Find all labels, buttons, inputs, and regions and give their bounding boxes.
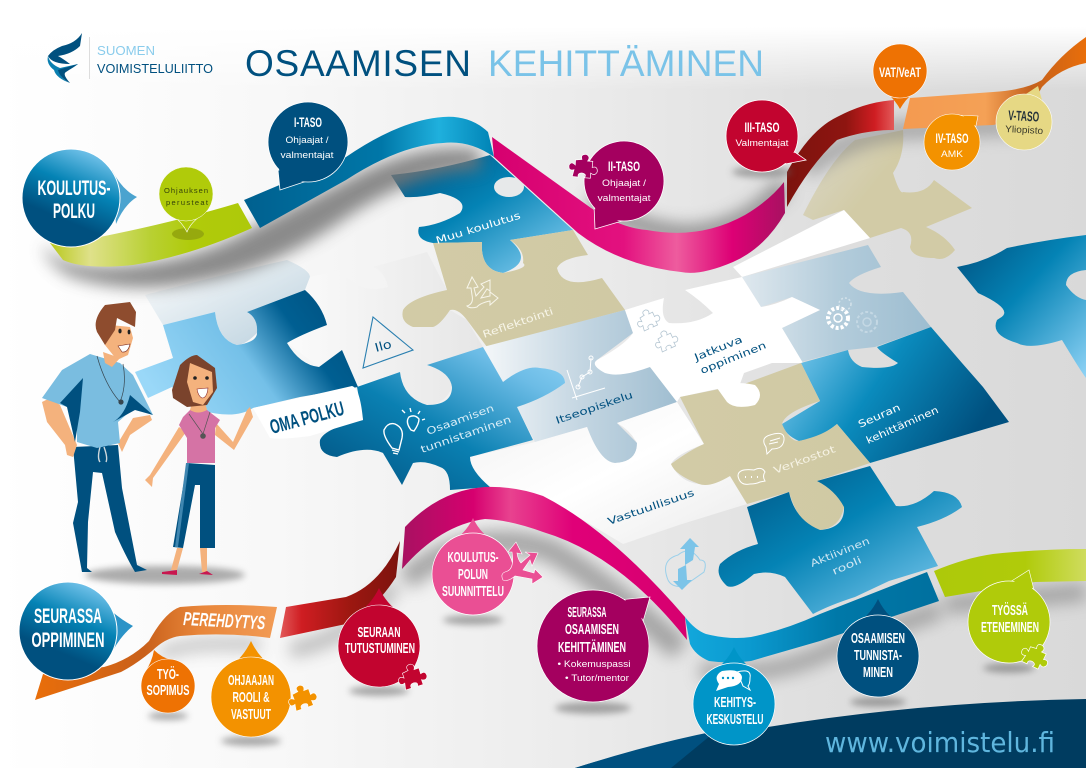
icon: speech bubbles: [716, 670, 750, 691]
bubble: Koulutuspolku: POLKU: [53, 200, 95, 223]
title: OSAAMISEN: [245, 43, 471, 84]
bottom ribbon: blue segment: [685, 572, 939, 662]
bubble: Seurassa oppiminen: [19, 582, 133, 680]
bubble: Seurassa osaamisen kehittäminen: SEURASSA: [568, 604, 607, 621]
shoes: [162, 570, 213, 575]
puzzle labels: rooli: [831, 555, 864, 578]
bubble: II-taso: II-TASO: [608, 158, 640, 174]
bubble: V-taso: [996, 86, 1052, 150]
bubble: Seurassa oppiminen: SEURASSA: [34, 605, 102, 628]
top ribbon: orange segment: [903, 37, 1086, 129]
piece: Ilo: [287, 252, 483, 405]
puzzle pieces: [135, 130, 1086, 614]
illustration: man: [42, 302, 245, 584]
bubble: Seurassa osaamisen kehittäminen: • Kokemuspassi: [558, 659, 630, 670]
hair: [172, 355, 217, 407]
icon: speech bubbles: [738, 433, 784, 484]
bubble: IV-taso: AMK: [941, 149, 964, 160]
title: KEHITTÄMINEN: [488, 43, 764, 84]
illustration: girl: [145, 355, 253, 575]
pants stripe: [175, 463, 189, 547]
puzzle labels: Aktiivinen: [809, 536, 872, 570]
right arm skin: [118, 415, 152, 452]
bubble: III-taso: [726, 100, 806, 178]
icon: branching arrows: [467, 277, 498, 308]
bubble: Seuraan tutustuminen: TUTUSTUMINEN: [345, 640, 415, 657]
top ribbon: blue segment: [244, 117, 494, 228]
top ribbon: dark red segment: [787, 100, 894, 207]
website address: www.voimistelu.fi: [825, 726, 1055, 759]
bubble: I-taso: valmentajat: [280, 150, 334, 161]
bubble: Työsopimus: SOPIMUS: [146, 682, 190, 699]
piece: left blue: [135, 290, 358, 415]
hair: [96, 302, 136, 345]
bubble: Ohjaajan rooli ja vastuut: ROOLI &: [232, 689, 270, 706]
bubble: III-taso: III-TASO: [744, 119, 780, 135]
bubble: II-taso: Ohjaajat /: [602, 178, 646, 189]
puzzle labels: Reflektointi: [481, 306, 555, 341]
bubble: V-taso: V-TASO: [1008, 107, 1040, 125]
face details: [193, 376, 197, 380]
legs: [171, 548, 207, 572]
face: [187, 363, 213, 405]
bubble: Ohjauksen perusteat: Ohjauksen: [164, 186, 208, 195]
arms: [145, 407, 253, 487]
icon: gears: [828, 298, 877, 332]
piece: Muu koulutus: [391, 155, 573, 273]
hole in Verkostot: [717, 383, 760, 407]
whistle: [189, 412, 210, 434]
puzzle labels: [419, 211, 940, 578]
oma polku label: OMA POLKU: [268, 398, 347, 439]
bubble: Koulutuspolun suunnittelu: [432, 518, 543, 625]
puzzle labels: tunnistaminen: [419, 415, 513, 456]
puzzle labels: Verkostot: [772, 444, 837, 477]
bubble: Osaamisen tunnistaminen: MINEN: [863, 664, 893, 681]
logo: VOIMISTELULIITTO: [97, 61, 213, 76]
bottom ribbon: green segment: [934, 549, 1086, 597]
bubble: I-taso: I-TASO: [294, 114, 322, 130]
shirt shadows: [60, 378, 153, 442]
bubble: Työsopimus: TYÖ-: [157, 666, 179, 683]
bubble: Työssä eteneminen: ETENEMINEN: [981, 619, 1039, 636]
bubble: Kehityskeskustelu: [693, 647, 775, 745]
piece: top-right tan: [803, 130, 972, 259]
icon: puzzle: [286, 683, 319, 712]
piece: gears: [742, 245, 931, 362]
piece: Vastuullisuus: [470, 402, 747, 544]
piece: faded top-left: [145, 260, 310, 345]
oma polku label: [253, 386, 363, 439]
pants: [173, 463, 215, 548]
piece: Seuran kehittäminen: [782, 327, 1009, 463]
bubble: Seurassa osaamisen kehittäminen: KEHITTÄMINEN: [558, 639, 626, 656]
bubble: Osaamisen tunnistaminen: [837, 599, 919, 707]
bubble: Koulutuspolun suunnittelu: SUUNNITTELU: [442, 583, 504, 600]
icon: puzzle: [396, 662, 429, 691]
bubble: Ohjaajan rooli ja vastuut: VASTUUT: [231, 706, 271, 723]
bubble: Ohjaajan rooli ja vastuut: [211, 641, 319, 746]
icon: triangle with Ilo: Ilo: [373, 337, 393, 355]
bubble: II-taso: [566, 141, 664, 229]
label: Perehdytys: PEREHDYTYS: [183, 609, 266, 634]
legs: [73, 445, 147, 572]
face details: [118, 329, 122, 333]
bottom ribbon: orange segment: [35, 605, 277, 700]
bubble: Työssä eteneminen: TYÖSSÄ: [992, 602, 1028, 619]
ribbon shadows: [43, 125, 1086, 672]
bubble: Seurassa osaamisen kehittäminen: • Tutor/mentor: [565, 673, 629, 684]
bubble: Työssä eteneminen: [968, 570, 1055, 674]
bubble: Ohjauksen perusteat: perusteat: [166, 198, 209, 207]
bubble: Ohjaajan rooli ja vastuut: OHJAAJAN: [228, 672, 274, 689]
shirt: [42, 354, 153, 448]
bubble: Ohjauksen perusteat: [159, 167, 213, 240]
icon: branching arrows: [502, 542, 543, 584]
bubble: Seurassa osaamisen kehittäminen: OSAAMISEN: [565, 621, 619, 638]
piece: Itseopiskelu: [483, 310, 677, 463]
bubble: II-taso: valmentajat: [598, 193, 651, 204]
bubble: Seuraan tutustuminen: [338, 588, 429, 696]
piece: Jatkuva oppiminen: [595, 277, 820, 402]
bubble: VAT/VeAT: VAT/VeAT: [879, 64, 921, 80]
bubble: Osaamisen tunnistaminen: TUNNISTA-: [854, 647, 902, 664]
puzzle labels: Osaamisen: [425, 403, 496, 438]
puzzle labels: Vastuullisuus: [606, 488, 696, 528]
piece: Osaamisen tunnistaminen: [320, 347, 565, 490]
bubble: Seurassa oppiminen: OPPIMINEN: [32, 629, 104, 652]
logo text: SUOMEN: [97, 43, 155, 58]
icon: puzzle: [1017, 637, 1055, 674]
bubble: Työsopimus: [141, 650, 195, 720]
top ribbon: magenta segment: [492, 137, 785, 273]
puzzle labels: oppiminen: [699, 340, 768, 377]
bubble: I-taso: Ohjaajat /: [286, 135, 329, 146]
icon: light bulbs: [384, 408, 425, 454]
bottom ribbon: red segment: [280, 541, 400, 638]
bubble: Kehityskeskustelu: KEHITYS-: [714, 694, 756, 711]
drawstring: [98, 447, 107, 462]
bubble: Koulutuspolun suunnittelu: KOULUTUS-: [448, 549, 498, 566]
piece: Reflektointi: [402, 230, 625, 347]
puzzle labels: kehittäminen: [865, 405, 940, 447]
hole in Muu koulutus: [494, 177, 524, 197]
bubble: IV-taso: IV-TASO: [936, 130, 969, 146]
icon: line chart: [567, 356, 605, 400]
puzzle labels: Itseopiskelu: [554, 390, 635, 427]
bubble: V-taso: Yliopisto: [1005, 124, 1043, 137]
piece: Aktiivinen rooli: [719, 466, 962, 614]
bubble: Seurassa osaamisen kehittäminen: [537, 590, 650, 714]
bubble: Seuraan tutustuminen: SEURAAN: [358, 624, 400, 641]
icon: puzzle: [566, 151, 601, 182]
puzzle labels: Seuran: [857, 402, 902, 431]
top: [179, 410, 220, 463]
bottom wave with website: [575, 699, 1086, 768]
puzzle labels: Muu koulutus: [435, 211, 522, 247]
icon: triangle with Ilo: [363, 317, 413, 368]
icon: cloud arrows: [666, 538, 705, 590]
puzzle labels: Jatkuva: [692, 334, 744, 364]
bottom ribbon: magenta segment: [402, 487, 687, 640]
bubble: III-taso: Valmentajat: [736, 138, 789, 149]
bubble: Koulutuspolun suunnittelu: POLUN: [458, 566, 488, 583]
bubble: IV-taso: [924, 114, 980, 170]
piece: white band: [733, 210, 870, 277]
bubble: Koulutuspolku: KOULUTUS-: [38, 177, 111, 200]
left arm skin: [42, 398, 77, 457]
bubble: Kehityskeskustelu: KESKUSTELU: [706, 711, 764, 728]
icon: outline puzzles: [634, 307, 680, 353]
title: [245, 43, 764, 84]
neck: [103, 352, 120, 367]
bubble: Osaamisen tunnistaminen: OSAAMISEN: [851, 630, 905, 647]
whistle cord: [97, 356, 124, 402]
piece: right blue: [957, 235, 1086, 378]
bubble: Koulutuspolku: [22, 149, 137, 247]
top ribbon: green segment: [50, 203, 252, 267]
neck: [190, 402, 207, 412]
piece: Verkostot: [671, 363, 870, 530]
face: [105, 325, 133, 360]
bubble: VAT/VeAT: [873, 44, 927, 109]
logo: [48, 33, 213, 83]
bubble: I-taso: [268, 102, 348, 190]
